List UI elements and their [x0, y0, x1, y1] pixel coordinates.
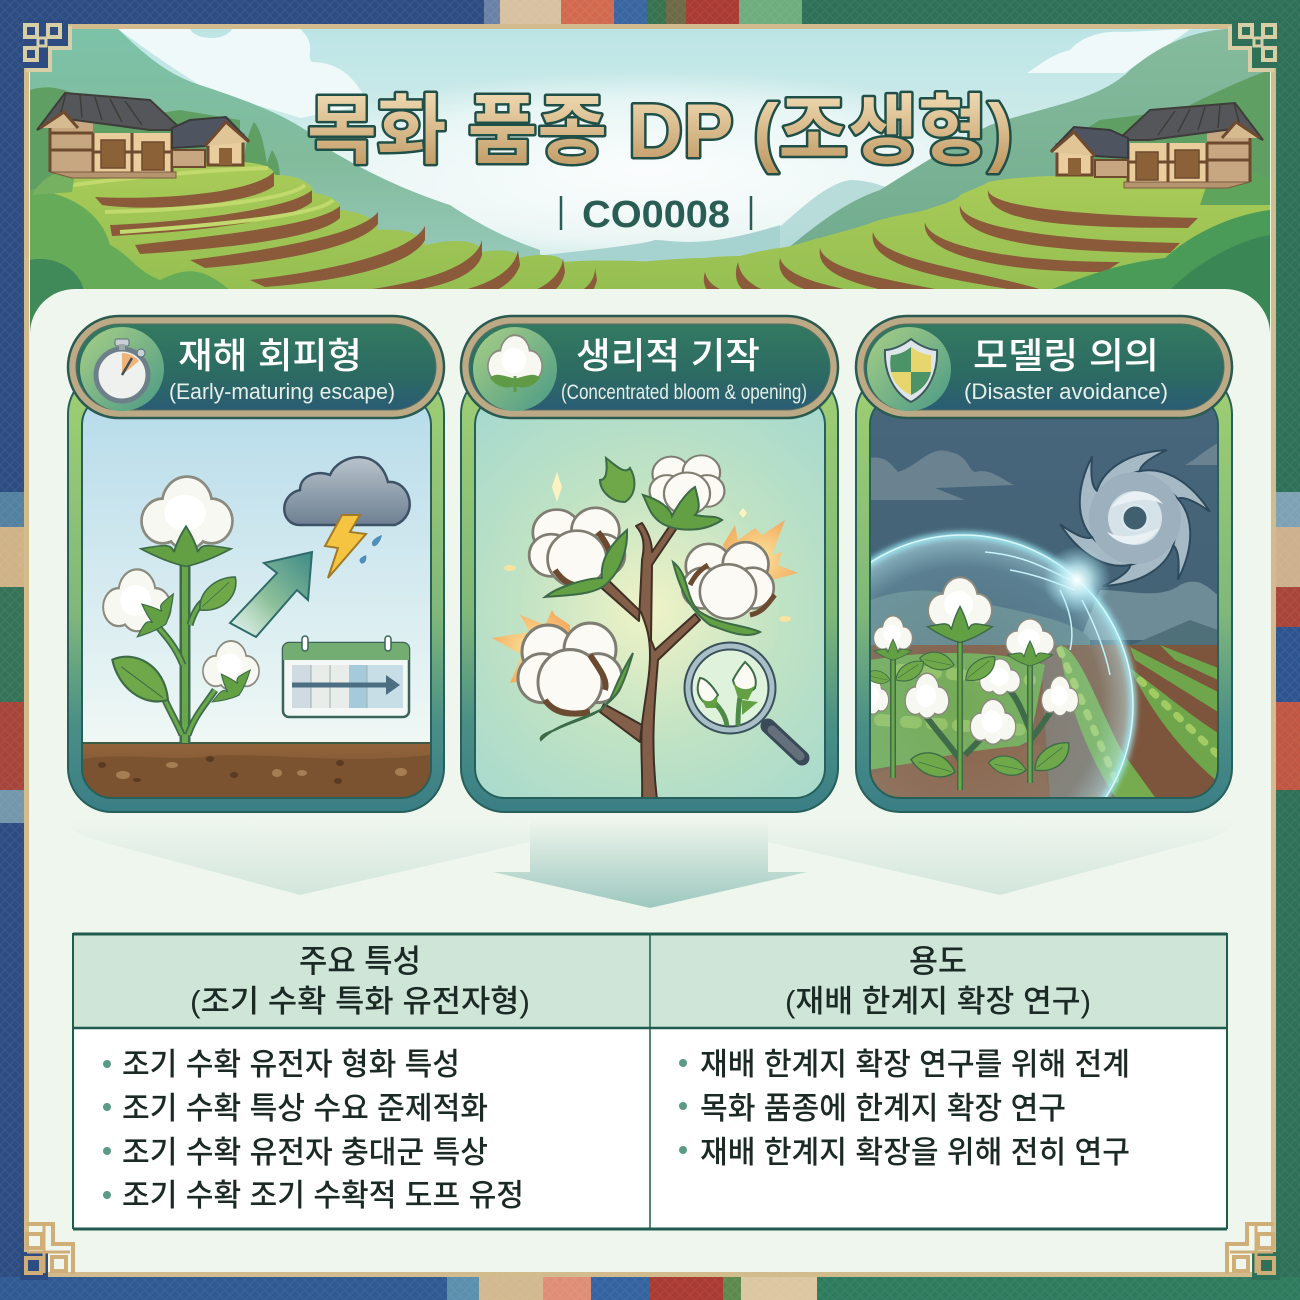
- top left corner: [20, 20, 70, 70]
- tree: [597, 523, 700, 800]
- header landscape: [30, 29, 1270, 350]
- subheading: (Disaster avoidance): [964, 379, 1168, 404]
- cotton plant: [103, 477, 259, 743]
- left column heading: (조기 수확 특화 유전자형): [190, 984, 530, 1019]
- top right corner: [1230, 20, 1280, 70]
- panel: card 1 early-maturing escape: [68, 370, 444, 812]
- clouds: [118, 29, 1190, 118]
- table: [73, 933, 1227, 1229]
- soil: [870, 645, 1218, 800]
- subheading: (Concentrated bloom & opening): [561, 381, 807, 404]
- table header background: [73, 933, 1227, 1028]
- dome: [871, 536, 1132, 797]
- crop rows: [870, 645, 1218, 800]
- pill header 3: [856, 316, 1232, 418]
- subheading: (Early-maturing escape): [169, 379, 395, 404]
- right list: [679, 1047, 1130, 1170]
- right column heading: [785, 943, 1091, 1019]
- bottom right corner: [1227, 1224, 1280, 1280]
- mountains: [871, 590, 1090, 645]
- bushes: [30, 174, 1270, 333]
- right list: 재배 한계지 확장 연구를 위해 전계: [700, 1047, 1130, 1082]
- dark clouds: [870, 443, 1218, 500]
- soil: [82, 743, 431, 803]
- left list: 조기 수확 조기 수확적 도프 유정: [122, 1178, 524, 1213]
- bursts: [723, 520, 798, 580]
- hurricane: [1056, 449, 1214, 587]
- magnifier: [688, 646, 802, 758]
- pill header 1: [68, 316, 444, 418]
- code subtitle: CO0008: [582, 194, 730, 236]
- heading: 생리적 기작: [576, 335, 760, 376]
- left list: 조기 수확 유전자 형화 특성: [122, 1047, 460, 1082]
- icon: shield: [867, 327, 951, 411]
- panel: card 2 concentrated bloom: [461, 370, 838, 812]
- arrow: center down: [493, 820, 807, 908]
- cream content panel: [30, 289, 1270, 1272]
- houses right: [1051, 103, 1263, 188]
- right list: 재배 한계지 확장을 위해 전히 연구: [700, 1135, 1130, 1170]
- calendar: [283, 636, 409, 717]
- terraces left: [53, 162, 646, 289]
- icon: stopwatch: [80, 327, 164, 411]
- left list: 조기 수확 특상 수요 준제적화: [122, 1091, 488, 1126]
- plants: [890, 642, 1054, 790]
- arrow: right funnel: [768, 820, 1235, 895]
- left list: [103, 1047, 524, 1213]
- arrow up right: [230, 552, 312, 637]
- right column heading: (재배 한계지 확장 연구): [785, 984, 1091, 1019]
- arrow: left funnel: [66, 820, 530, 895]
- tree line: [30, 70, 1270, 190]
- free leaf: [600, 458, 634, 502]
- left mountain: [30, 29, 540, 258]
- left list: 조기 수확 유전자 충대군 특상: [122, 1135, 488, 1170]
- terraces right: [645, 175, 1270, 289]
- pill header 2: [461, 316, 838, 418]
- left column heading: 주요 특성: [299, 943, 421, 979]
- title: 목화 품종 DP (조생형): [307, 89, 1013, 174]
- houses left: [37, 93, 249, 178]
- icon: cotton: [473, 327, 557, 411]
- heading: 모델링 의의: [973, 335, 1159, 376]
- right column heading: 용도: [909, 943, 967, 979]
- sparks: [552, 472, 747, 518]
- storm cloud: [284, 457, 410, 578]
- center haze: [332, 78, 967, 255]
- far mountains: [540, 180, 886, 255]
- heading: 재해 회피형: [178, 335, 362, 376]
- right mountain: [790, 29, 1264, 246]
- bottom left corner: [20, 1224, 73, 1280]
- panel: card 3 disaster avoidance: [855, 392, 1233, 813]
- bolls: [518, 455, 775, 740]
- left column heading: [190, 943, 530, 1019]
- right list: 목화 품종에 한계지 확장 연구: [700, 1091, 1066, 1126]
